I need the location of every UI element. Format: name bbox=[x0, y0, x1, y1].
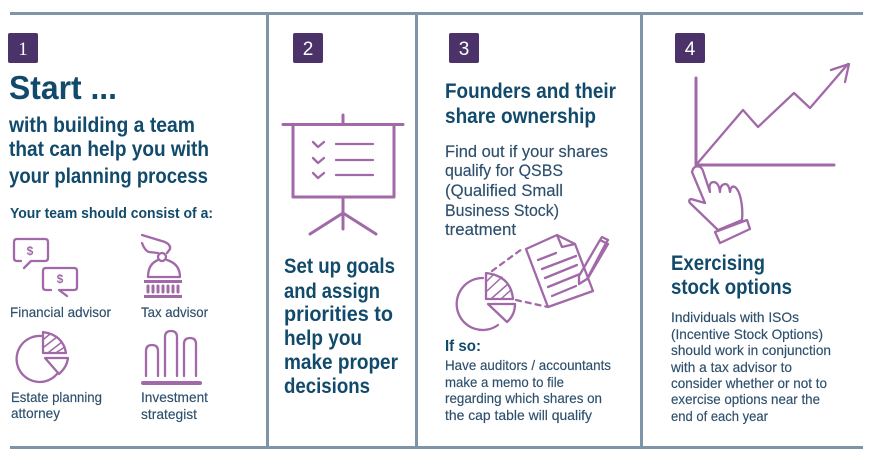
text: have auditors bbox=[445, 357, 611, 423]
text: individuals with isos bbox=[670, 309, 831, 424]
heading: founders bbox=[445, 79, 617, 128]
text: individuals with isos: with a tax advisor to bbox=[670, 359, 792, 375]
subheading: building a team: your planning process bbox=[9, 164, 208, 188]
team intro: Your team should consist of a: bbox=[10, 205, 213, 222]
badge 4: 4 bbox=[685, 39, 696, 60]
badge 3: 3 bbox=[459, 39, 469, 60]
text: set up goals: and assign bbox=[284, 279, 380, 303]
label: investment strategist: strategist bbox=[141, 406, 197, 422]
text: have auditors: make a memo to file bbox=[445, 374, 564, 390]
panel: step 2 goals bbox=[283, 33, 403, 398]
label: tax advisor: Tax advisor bbox=[141, 304, 208, 320]
text: individuals with isos: (Incentive Stock Options) bbox=[671, 326, 823, 342]
text: find out: (Qualified Small bbox=[445, 181, 563, 200]
icon: financial advisor speech bubbles: $ bbox=[57, 272, 64, 286]
subheading: building a team: with building a team bbox=[8, 113, 195, 137]
text: set up goals: decisions bbox=[284, 374, 370, 398]
panel: step 3 founders bbox=[445, 33, 617, 423]
text: set up goals: Set up goals bbox=[284, 254, 395, 278]
text: individuals with isos: end of each year bbox=[671, 408, 768, 424]
panel: step 1 build a team bbox=[8, 33, 213, 422]
text: individuals with isos: exercise options near the bbox=[671, 391, 820, 407]
text: set up goals bbox=[284, 254, 399, 398]
text: have auditors: the cap table will qualify bbox=[445, 407, 592, 423]
label: investment strategist: Investment bbox=[141, 389, 208, 405]
text: set up goals: make proper bbox=[284, 350, 399, 374]
text: find out: Find out if your shares bbox=[445, 142, 608, 161]
label: financial advisor: Financial advisor bbox=[10, 304, 111, 320]
icon: financial advisor speech bubbles bbox=[14, 239, 77, 296]
badge 2 bbox=[293, 33, 323, 63]
text: set up goals: priorities to bbox=[284, 302, 393, 326]
icon: presentation board bbox=[283, 115, 403, 234]
heading: start: Start ... bbox=[9, 69, 117, 106]
heading: founders: Founders and their bbox=[445, 79, 617, 103]
heading: exercising stock options: stock options bbox=[671, 275, 792, 299]
subheading: building a team bbox=[8, 113, 209, 188]
text: individuals with isos: Individuals with ISOs bbox=[671, 309, 799, 325]
text: find out: qualify for QSBS bbox=[445, 161, 563, 180]
panel: step 4 stock options bbox=[670, 33, 849, 424]
badge 1 bbox=[8, 33, 38, 63]
label: if so: If so: bbox=[445, 338, 481, 355]
badge 1: 1 bbox=[18, 39, 28, 60]
icon: estate planning pie chart bbox=[17, 332, 68, 382]
text: find out bbox=[445, 142, 608, 239]
heading: exercising stock options: Exercising bbox=[671, 251, 765, 275]
heading: founders: share ownership bbox=[445, 104, 596, 128]
icon: investment bar chart bbox=[143, 331, 200, 383]
text: have auditors: regarding which shares on bbox=[445, 390, 602, 406]
badge 4 bbox=[675, 33, 705, 63]
subheading: building a team: that can help you with bbox=[9, 137, 209, 161]
text: find out: treatment bbox=[445, 220, 516, 239]
label: estate planning attorney: Estate planning bbox=[11, 389, 102, 405]
icon: pie chart and document bbox=[457, 235, 608, 330]
badge 3 bbox=[449, 33, 479, 63]
icon: rising chart with pointing hand bbox=[689, 64, 849, 243]
label: estate planning attorney: attorney bbox=[11, 405, 60, 421]
badge 2: 2 bbox=[303, 39, 313, 60]
icon: tax advisor hand and coin bbox=[142, 235, 182, 298]
text: individuals with isos: should work in conjunction bbox=[671, 342, 831, 358]
text: individuals with isos: consider whether or not to bbox=[671, 375, 827, 391]
icon: financial advisor speech bubbles: $ bbox=[27, 244, 34, 258]
text: set up goals: help you bbox=[284, 326, 362, 350]
label: estate planning attorney bbox=[11, 389, 102, 421]
label: investment strategist bbox=[141, 389, 208, 422]
text: have auditors: Have auditors / accountants bbox=[445, 357, 611, 373]
heading: exercising stock options bbox=[671, 251, 792, 299]
text: find out: Business Stock) bbox=[445, 201, 559, 220]
